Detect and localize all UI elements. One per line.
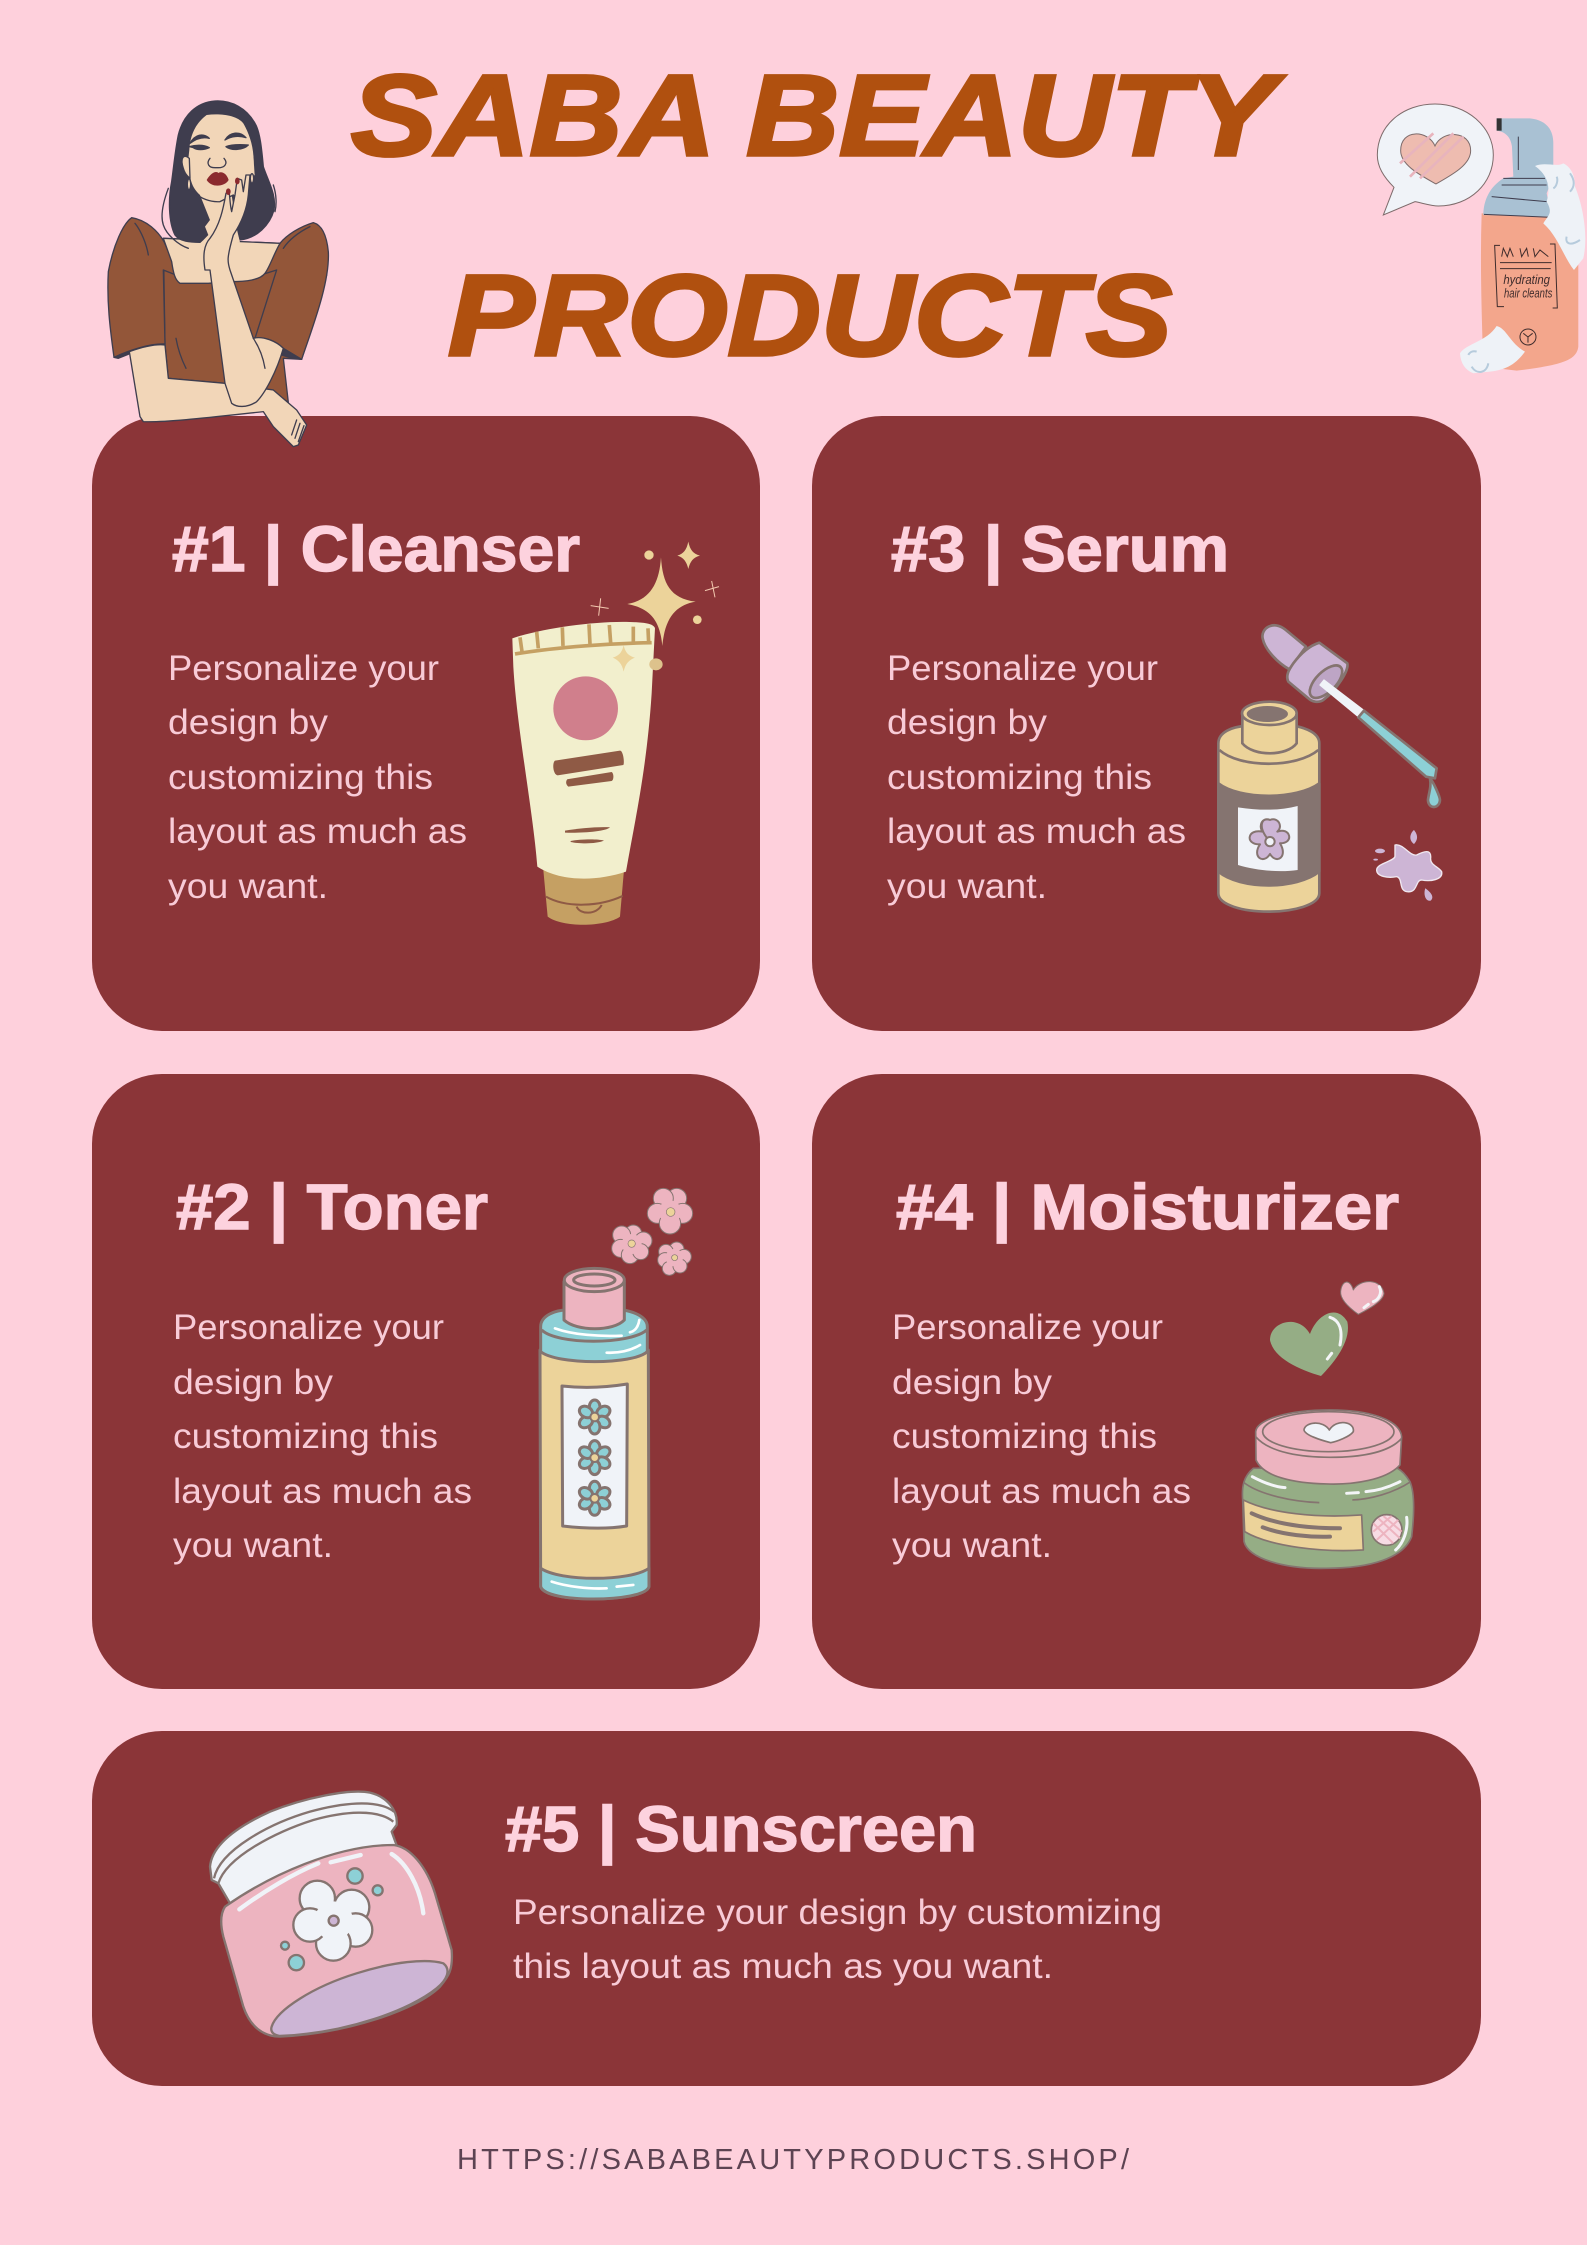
text: toner description: layout as much as <box>173 1472 472 1511</box>
text: serum description: customizing this <box>887 758 1152 797</box>
footer url: HTTPS://SABABEAUTYPRODUCTS.SHOP/ <box>457 2144 1130 2176</box>
text: sunscreen description: Personalize your design by customizing <box>513 1893 1162 1932</box>
text: moisturizer description: you want. <box>892 1526 1052 1565</box>
text: moisturizer description: design by <box>892 1363 1053 1402</box>
icon: serum bottle with dropper <box>1218 625 1442 912</box>
text: serum description: layout as much as <box>887 812 1186 851</box>
text: serum description: design by <box>887 703 1048 742</box>
text: moisturizer description: Personalize your <box>892 1308 1163 1347</box>
icon: woman illustration <box>108 101 328 447</box>
icon: sunscreen jar <box>210 1792 452 2037</box>
heading: moisturizer: #4 | Moisturizer <box>896 1171 1399 1244</box>
heading: sunscreen: #5 | Sunscreen <box>505 1793 977 1866</box>
panel: serum <box>812 416 1481 1031</box>
text: cleanser description: layout as much as <box>168 812 467 851</box>
text: sunscreen description: this layout as much as you want. <box>513 1947 1053 1986</box>
text: sunscreen description <box>513 1893 1162 1986</box>
title: PRODUCTS <box>448 252 1172 380</box>
text: serum description: you want. <box>887 867 1047 906</box>
text: cleanser description: design by <box>168 703 329 742</box>
icon: toner bottle with flowers <box>540 1188 693 1599</box>
text: moisturizer description <box>892 1308 1191 1565</box>
icon: moisturizer jar with hearts <box>1242 1282 1414 1568</box>
icon: foam pump bottle with heart speech bubble: hydrating <box>1503 273 1550 287</box>
text: cleanser description <box>168 649 467 906</box>
text: serum description <box>887 649 1186 906</box>
text: toner description: design by <box>173 1363 334 1402</box>
heading: toner: #2 | Toner <box>176 1171 488 1244</box>
icon: cleanser tube with sparkles <box>512 542 719 925</box>
icon: foam pump bottle with heart speech bubble: hair cleants <box>1504 286 1553 300</box>
text: serum description: Personalize your <box>887 649 1158 688</box>
panel: cleanser <box>92 416 760 1031</box>
text: moisturizer description: customizing this <box>892 1417 1157 1456</box>
title: SABA BEAUTY <box>351 52 1285 180</box>
panel: sunscreen <box>92 1731 1481 2086</box>
icon: foam pump bottle with heart speech bubble <box>1377 104 1585 373</box>
panel: toner <box>92 1074 760 1689</box>
heading: serum: #3 | Serum <box>891 513 1229 586</box>
title <box>351 52 1285 380</box>
text: moisturizer description: layout as much as <box>892 1472 1191 1511</box>
text: cleanser description: Personalize your <box>168 649 439 688</box>
text: toner description <box>173 1308 472 1565</box>
text: toner description: you want. <box>173 1526 333 1565</box>
text: cleanser description: you want. <box>168 867 328 906</box>
text: cleanser description: customizing this <box>168 758 433 797</box>
text: toner description: Personalize your <box>173 1308 444 1347</box>
text: toner description: customizing this <box>173 1417 438 1456</box>
panel: moisturizer <box>812 1074 1481 1689</box>
heading: cleanser: #1 | Cleanser <box>172 513 580 586</box>
